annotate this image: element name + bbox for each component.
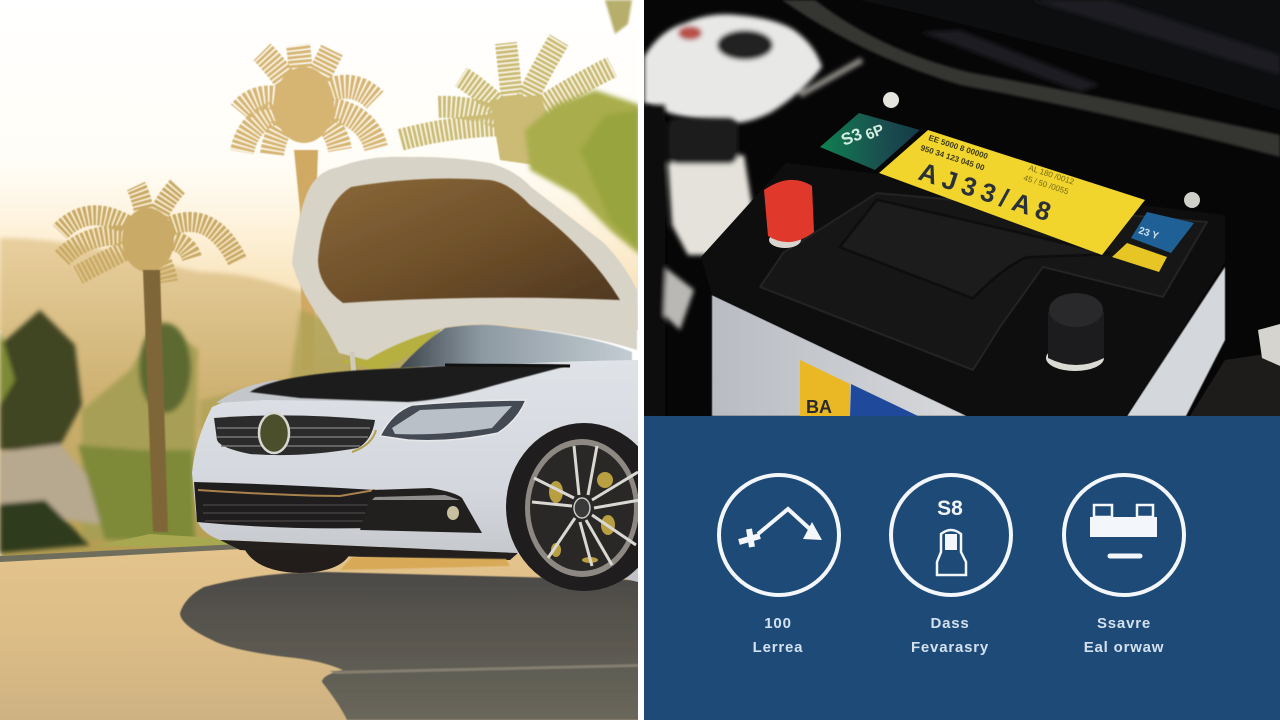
under-car shadow — [220, 540, 518, 560]
panel: battery photo: 23 Y — [1137, 225, 1160, 242]
front right wheel — [506, 423, 638, 591]
icon: battery — [1064, 475, 1184, 595]
panel: battery photo: BA — [806, 397, 832, 417]
green behind windshield — [340, 326, 445, 370]
caption: third icon: Ssavre — [1097, 615, 1151, 632]
right corner block — [1190, 352, 1280, 416]
hood front lip — [216, 380, 410, 403]
yellow label: EE 5000 8 00000 — [927, 133, 989, 161]
caption: third icon: Eal orwaw — [1084, 639, 1164, 656]
caption: second icon — [911, 615, 989, 656]
kerb — [0, 544, 240, 562]
yellow label: AL 180 /0012 — [1027, 163, 1076, 187]
tree: right green — [525, 90, 640, 255]
caption: third icon — [1084, 615, 1164, 656]
headlight — [380, 400, 526, 441]
battery top tray — [701, 163, 1225, 416]
yellow label — [879, 130, 1145, 255]
palm: centre — [240, 45, 376, 370]
lower intake — [194, 482, 375, 528]
wipers — [445, 365, 570, 366]
caption: first icon: Lerrea — [753, 639, 803, 656]
hood prop rod — [352, 352, 354, 376]
palm: top right corner — [605, 0, 632, 34]
palm: right group — [400, 40, 612, 170]
open hood — [292, 157, 637, 376]
recessed lid — [840, 200, 1110, 298]
battery case — [712, 295, 967, 416]
caption: first icon — [753, 615, 803, 656]
blue label — [1131, 212, 1194, 253]
yellow label: AJ33/A8 — [915, 156, 1055, 227]
left trees and hedge — [0, 310, 420, 553]
icon: wrench and arrow — [719, 475, 839, 595]
windshield — [400, 325, 632, 368]
panel: blue info band — [644, 416, 1280, 720]
panel: car photo — [0, 0, 662, 720]
coolant reservoir — [644, 14, 862, 123]
gold trim line — [198, 490, 375, 496]
icon: price and hand — [891, 475, 1011, 595]
small caps — [883, 92, 899, 108]
road — [0, 549, 640, 720]
sunlit sky — [0, 147, 638, 330]
engine bay edge — [782, 0, 1280, 157]
caption: first icon: 100 — [764, 615, 792, 632]
small yellow label — [1112, 243, 1167, 272]
car body — [192, 360, 638, 582]
chrome trim — [352, 430, 376, 452]
grass verge — [96, 534, 228, 546]
yellow label: 45 / 50 /0055 — [1022, 173, 1070, 197]
hood panel highlights — [920, 0, 1280, 92]
black terminal — [1046, 293, 1104, 371]
palm: left — [60, 186, 238, 282]
hills — [0, 238, 420, 560]
icon: price and hand: S8 — [937, 497, 963, 520]
panel: battery photo: S3 — [838, 124, 865, 150]
red terminal — [764, 180, 814, 248]
caption: second icon: Fevarasry — [911, 639, 989, 656]
panel: battery photo: 6P — [863, 121, 887, 144]
front grille — [214, 415, 375, 455]
fog lamp surround — [360, 488, 482, 533]
panel: battery photo — [644, 0, 1280, 417]
sunlit road under car — [340, 557, 510, 570]
hood outer shell — [292, 157, 637, 360]
case label: yellow — [800, 360, 850, 416]
battery cover — [760, 193, 1207, 370]
side bottle — [644, 105, 752, 416]
caption: second icon: Dass — [930, 615, 970, 632]
yellow label: 950 34 123 045 00 — [919, 143, 986, 173]
car shadow — [180, 572, 640, 720]
road line in shadow — [330, 664, 640, 674]
badge — [259, 413, 289, 453]
hood inner lining — [318, 179, 620, 303]
front left tyre — [245, 550, 351, 573]
engine bay dark — [250, 364, 571, 402]
hood underside — [860, 0, 1280, 110]
green label — [820, 113, 920, 170]
case label: blue — [850, 384, 918, 416]
palm trunk: left lower — [143, 270, 168, 532]
